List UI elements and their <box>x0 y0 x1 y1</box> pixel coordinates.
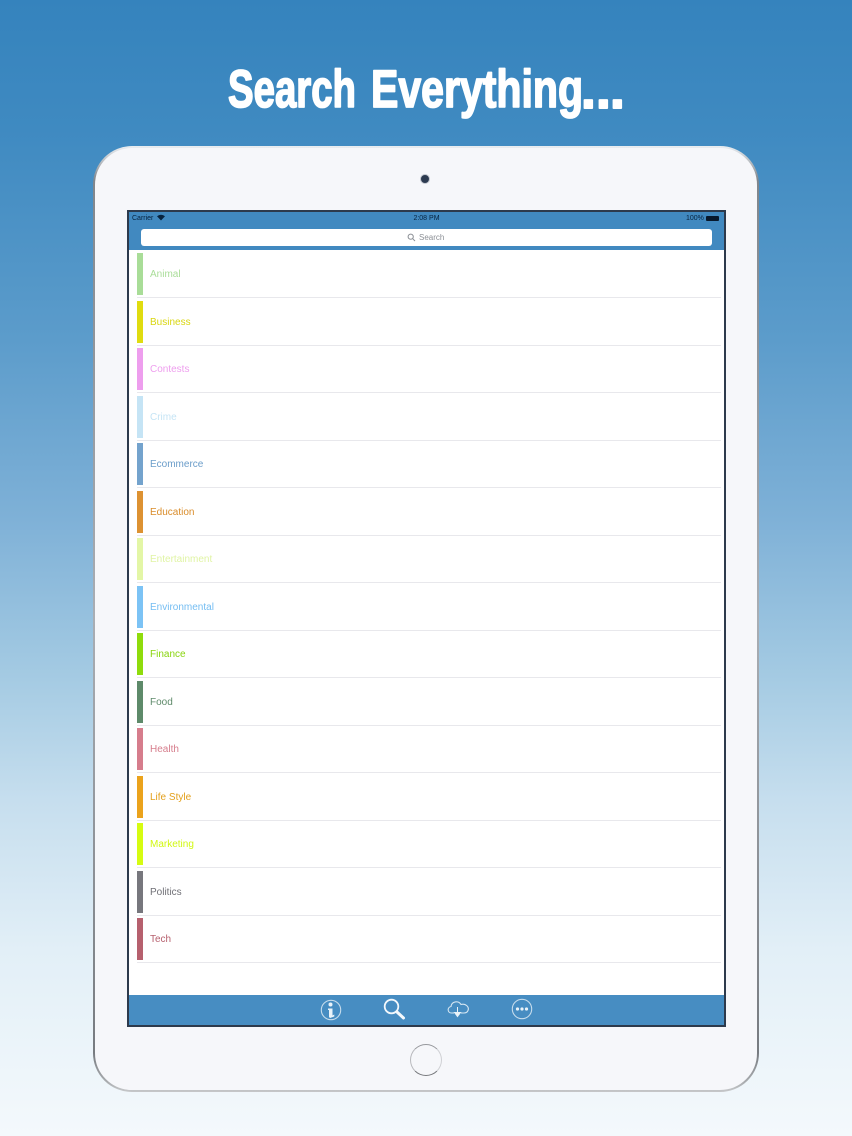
row: Environmental <box>137 586 721 631</box>
row: Health <box>137 728 721 773</box>
tab bar <box>129 995 724 1025</box>
row: Marketing: Marketing <box>150 839 194 850</box>
icon: cloud download <box>448 1001 469 1018</box>
row: Ecommerce: Ecommerce <box>150 459 203 470</box>
row: Food <box>137 681 721 726</box>
row: Food: Food <box>150 696 173 708</box>
row: Animal: Animal <box>150 269 181 280</box>
row: Crime: Crime <box>150 412 177 422</box>
row: Life Style: Life Style <box>150 792 191 802</box>
row: Politics: Politics <box>150 886 182 898</box>
row: Contests: Contests <box>150 364 189 375</box>
home button <box>410 1044 442 1076</box>
row: Animal <box>137 253 721 298</box>
row: Health: Health <box>150 744 179 755</box>
row: Finance: Finance <box>150 649 186 660</box>
screen <box>127 210 726 1027</box>
search bar <box>141 229 712 246</box>
row: Politics <box>137 871 721 916</box>
row: Tech <box>137 918 721 963</box>
row: Marketing <box>137 823 721 868</box>
row: Business: Business <box>150 316 191 328</box>
status bar battery: 100% <box>686 215 704 222</box>
status bar battery <box>686 215 719 222</box>
status bar carrier: Carrier <box>132 215 153 222</box>
navigation header <box>129 212 724 250</box>
search placeholder: Search <box>419 233 444 242</box>
row: Crime <box>137 396 721 441</box>
row: Ecommerce <box>137 443 721 488</box>
row: Entertainment: Entertainment <box>150 554 212 565</box>
row: Finance <box>137 633 721 678</box>
row: Life Style <box>137 776 721 821</box>
icon: info <box>320 1000 342 1020</box>
row: Education <box>137 491 721 536</box>
tablet device <box>93 146 759 1092</box>
title: ... <box>581 61 625 120</box>
status bar time: 2:08 PM <box>413 215 440 222</box>
row: Entertainment <box>137 538 721 583</box>
icon: wifi <box>157 214 165 220</box>
row: Environmental: Environmental <box>150 602 214 612</box>
front camera <box>420 174 430 184</box>
row: Business <box>137 301 721 346</box>
title: Everything <box>371 60 583 119</box>
title <box>228 60 625 120</box>
title: Search <box>228 60 356 119</box>
icon: search small <box>408 234 416 242</box>
row: Tech: Tech <box>150 934 171 945</box>
row: Contests <box>137 348 721 393</box>
row: Education: Education <box>150 506 194 518</box>
icon: search <box>384 998 406 1020</box>
icon: more <box>512 998 532 1020</box>
